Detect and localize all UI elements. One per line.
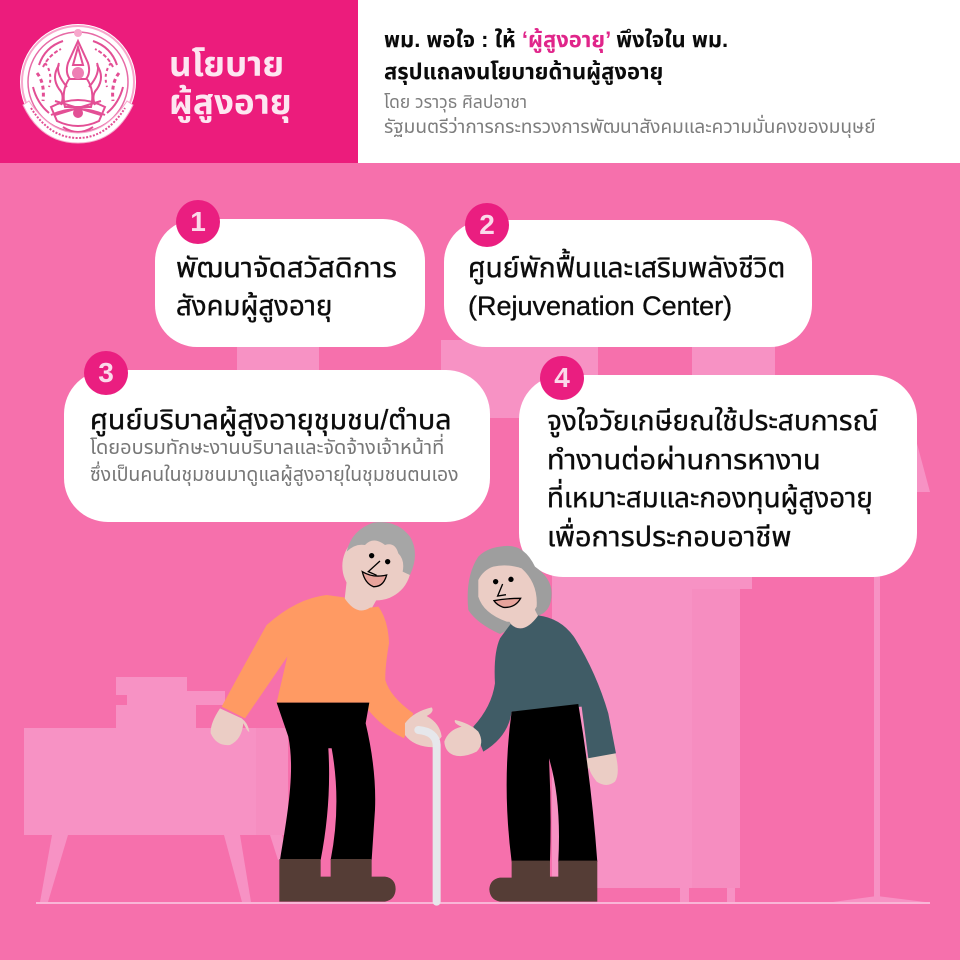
text: policy 4: ที่เหมาะสมและกองทุนผู้สูงอายุ — [547, 482, 873, 513]
badge: number 3 — [84, 351, 128, 395]
text: policy 2: (Rejuvenation Center) — [468, 291, 732, 321]
elderly woman — [444, 546, 618, 902]
author byline — [384, 92, 876, 138]
icon: ministry emblem seal — [20, 24, 136, 144]
text: policy 2 — [468, 248, 785, 321]
text: policy 1 — [176, 252, 397, 323]
text: policy 4 — [547, 405, 878, 552]
text: policy 4: จูงใจวัยเกษียณใช้ประสบการณ์ — [547, 405, 878, 436]
panel: policy 1 — [155, 219, 425, 347]
headline — [384, 27, 728, 85]
author byline: รัฐมนตรีว่าการกระทรวงการพัฒนาสังคมและความมั่นคงของมนุษย์ — [384, 117, 876, 138]
badge: number 2 — [465, 203, 509, 247]
text: policy 1: พัฒนาจัดสวัสดิการ — [176, 252, 397, 283]
panel: policy 4 — [519, 375, 917, 577]
badge: number 1: 1 — [190, 206, 206, 237]
text: policy 3 detail: โดยอบรมทักษะงานบริบาลและจัดจ้างเจ้าหน้าที่ — [90, 437, 444, 459]
badge: number 2: 2 — [479, 209, 495, 240]
title: policy for the elderly: นโยบาย — [169, 45, 284, 84]
badge: number 4: 4 — [554, 362, 570, 393]
elderly man with cane — [211, 522, 442, 902]
header: white description panel — [358, 0, 960, 163]
text: policy 4: เพื่อการประกอบอาชีพ — [547, 520, 791, 552]
badge: number 4 — [540, 356, 584, 400]
headline: พม. พอใจ : ให้ ‘ผู้สูงอายุ’ พึงใจใน พม. — [384, 27, 728, 52]
badge: number 1 — [176, 200, 220, 244]
author byline: โดย วราวุธ ศิลปอาชา — [384, 92, 527, 112]
panel: policy 2 — [444, 220, 812, 347]
title: policy for the elderly — [169, 45, 292, 123]
text: policy 3 detail — [90, 434, 459, 486]
text: policy 3 detail: ซึ่งเป็นคนในชุมชนมาดูแลผู้สูงอายุในชุมชนตนเอง — [90, 464, 459, 486]
text: policy 2: ศูนย์พักฟื้นและเสริมพลังชีวิต — [468, 252, 785, 283]
text: policy 3 heading: ศูนย์บริบาลผู้สูงอายุชุมชน/ตำบล — [90, 404, 452, 435]
headline: สรุปแถลงนโยบายด้านผู้สูงอายุ — [384, 59, 663, 84]
badge: number 3: 3 — [98, 357, 114, 388]
title: policy for the elderly: ผู้สูงอายุ — [169, 83, 292, 122]
text: policy 1: สังคมผู้สูงอายุ — [176, 290, 332, 321]
text: policy 4: ทำงานต่อผ่านการหางาน — [547, 444, 821, 474]
panel: policy 3 — [64, 370, 490, 522]
header: magenta title panel — [0, 0, 358, 163]
